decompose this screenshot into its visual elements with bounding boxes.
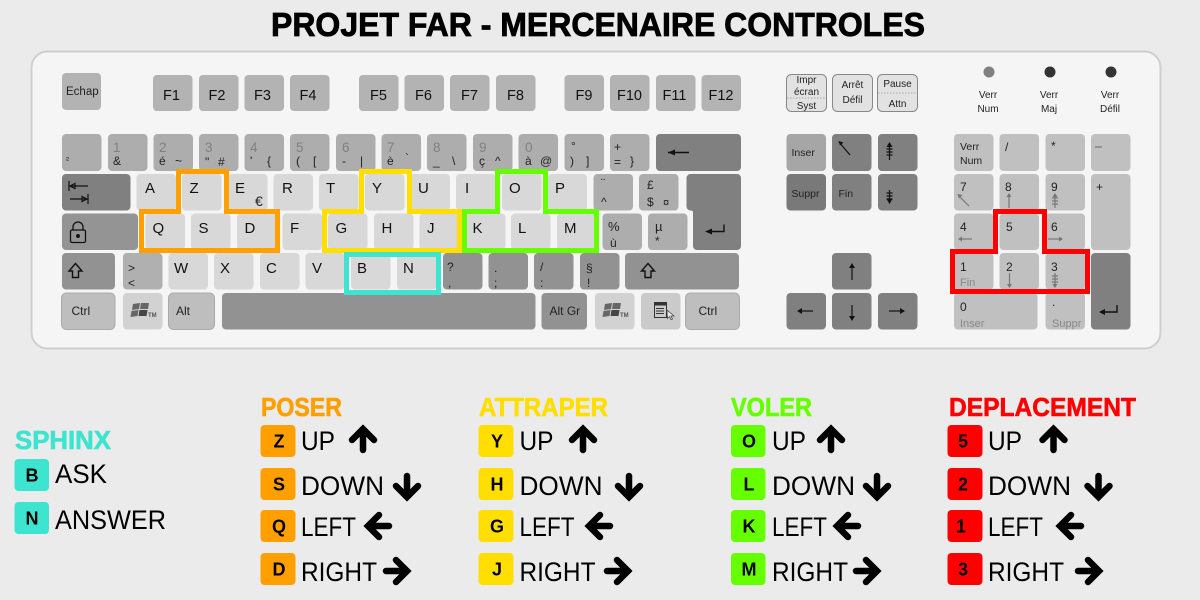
- label: answer: ANSWER: [55, 505, 166, 535]
- system keys: Arrêt: [842, 80, 864, 91]
- highlight: green keys OKLM: [464, 172, 596, 250]
- row: Y up: Y: [491, 432, 503, 452]
- letter row AZERTY: A: [145, 180, 155, 197]
- heading: deplacement: DEPLACEMENT: [949, 394, 1136, 422]
- letter row WXCV: X: [220, 260, 230, 277]
- number key row: °: [571, 139, 576, 153]
- system keys: [786, 74, 918, 112]
- panel: sphinx legend: [14, 427, 166, 535]
- number key row: =: [614, 155, 621, 169]
- function key row: F2: [208, 88, 225, 104]
- number key row: ): [570, 154, 574, 168]
- panel: attraper legend: [478, 394, 640, 587]
- number key row: `: [405, 151, 409, 165]
- row: J right: RIGHT: [520, 557, 596, 587]
- row: 3 right: RIGHT: [988, 557, 1064, 587]
- letter row AZERTY: €: [255, 193, 263, 209]
- row: G left: LEFT: [520, 512, 574, 542]
- function key row: F12: [708, 88, 734, 104]
- number key row: è: [387, 154, 394, 168]
- icon: tab arrows: [69, 181, 88, 204]
- number key row: \: [452, 154, 456, 168]
- numeric keypad: .: [1052, 295, 1055, 309]
- row: G left: G: [490, 516, 504, 536]
- highlight: cyan keys BN: [346, 254, 438, 292]
- letter row QSDF: [62, 214, 688, 250]
- numeric keypad: 5: [1006, 220, 1013, 234]
- bottom key row: Alt Gr: [550, 304, 580, 318]
- function key row: F10: [617, 88, 642, 104]
- function key row: F7: [461, 88, 478, 104]
- row: H down: DOWN: [520, 471, 602, 501]
- row: O up: O: [742, 432, 756, 452]
- letter row WXCV: .: [494, 261, 497, 275]
- letter row WXCV: N: [403, 260, 414, 277]
- row: S down: S: [273, 474, 285, 494]
- heading: voler: VOLER: [731, 394, 812, 422]
- numeric keypad: 8: [1005, 180, 1012, 194]
- number key row: 1: [113, 140, 121, 155]
- numeric keypad: 9: [1051, 180, 1058, 194]
- letter row AZERTY: ¤: [663, 197, 669, 209]
- number key row: |: [360, 154, 363, 168]
- icon: windows logo right: TM: [620, 313, 629, 319]
- letter row AZERTY: P: [555, 180, 565, 197]
- number key row: ^: [495, 154, 501, 168]
- number key row: ç: [479, 154, 485, 168]
- row: 1 left: LEFT: [988, 512, 1043, 542]
- bottom key row: Ctrl: [698, 304, 717, 318]
- status lights: Maj: [1041, 104, 1057, 115]
- row: O up: [731, 425, 842, 457]
- status lights: Défil: [1100, 104, 1120, 115]
- numeric keypad: *: [1051, 139, 1056, 153]
- number key row: &: [113, 154, 121, 168]
- letter row QSDF: H: [382, 220, 392, 237]
- letter row WXCV: §: [586, 261, 593, 275]
- system keys: Impr: [796, 75, 817, 86]
- number key row: [: [313, 154, 317, 168]
- row: J right: [478, 553, 628, 587]
- numeric keypad: 2: [1006, 260, 1013, 274]
- numeric keypad: 0: [960, 300, 967, 314]
- row: 5 up: 5: [958, 432, 968, 452]
- letter row AZERTY: $: [647, 195, 654, 209]
- number key row: ~: [175, 154, 182, 168]
- letter row QSDF: F: [290, 220, 299, 237]
- letter row WXCV: W: [174, 260, 189, 277]
- numeric keypad: 7: [960, 180, 967, 194]
- letter row AZERTY: I: [465, 180, 469, 197]
- function key row: F11: [662, 88, 686, 104]
- row: Q left: Q: [272, 516, 286, 536]
- row: D right: [260, 553, 407, 587]
- letter row AZERTY: ^: [601, 195, 607, 209]
- panel: keyboard: [32, 52, 1160, 348]
- function key row: F9: [576, 88, 592, 104]
- icon: context menu: [654, 302, 674, 320]
- letter row WXCV: <: [128, 276, 135, 290]
- icon: windows logo: [130, 303, 157, 319]
- number key row: [62, 134, 741, 171]
- row: 2 down: DOWN: [988, 471, 1071, 501]
- letter row WXCV: B: [357, 260, 367, 277]
- row: Y up: UP: [520, 426, 554, 456]
- numeric keypad: [954, 134, 1130, 330]
- row: H down: H: [490, 474, 504, 494]
- letter row AZERTY: Z: [190, 180, 199, 197]
- row: 2 down: 2: [958, 474, 968, 494]
- number key row: 7: [387, 140, 395, 155]
- system keys: écran: [794, 87, 819, 98]
- row: 1 left: [948, 510, 1081, 542]
- number key row: à: [525, 154, 532, 168]
- status lights: Verr: [979, 90, 998, 101]
- system keys: Défil: [842, 95, 863, 106]
- letter row QSDF: ù: [610, 236, 617, 250]
- system keys: Pause: [883, 79, 912, 90]
- bottom key row: [62, 293, 740, 330]
- numeric keypad: Fin: [960, 277, 975, 289]
- row: L down: L: [744, 474, 754, 494]
- numeric keypad: 4: [960, 220, 967, 234]
- number key row: 2: [159, 140, 167, 155]
- letter row QSDF: µ: [655, 219, 663, 234]
- row: D right: RIGHT: [301, 557, 377, 587]
- function key row: Echap: [66, 86, 99, 98]
- numeric keypad: Verr: [960, 141, 980, 153]
- row: M right: RIGHT: [772, 557, 848, 587]
- status lights: [977, 66, 1120, 115]
- letter row AZERTY: [62, 174, 678, 210]
- icon: windows logo right: [602, 303, 629, 319]
- badge: N: [14, 502, 49, 534]
- row: K left: K: [742, 516, 756, 536]
- panel: deplacement legend: [948, 394, 1136, 587]
- row: Z up: Z: [274, 432, 284, 452]
- row: 5 up: [948, 425, 1064, 457]
- letter row AZERTY: O: [509, 180, 521, 197]
- row: Z up: UP: [301, 426, 335, 456]
- status lights: Verr: [1101, 90, 1120, 101]
- row: Q left: [260, 510, 389, 542]
- row: Q left: LEFT: [301, 512, 356, 542]
- navigation keys: Fin: [838, 188, 853, 200]
- badge: B: B: [26, 466, 38, 486]
- heading: attraper: ATTRAPER: [479, 394, 608, 422]
- row: 1 left: 1: [956, 516, 966, 536]
- row: J right: J: [492, 560, 502, 580]
- row: S down: DOWN: [301, 471, 384, 501]
- highlight: yellow keys YGHJ: [324, 172, 460, 250]
- highlight: red keys 5123: [952, 212, 1088, 292]
- row: H down: [478, 468, 640, 501]
- icon: windows logo: TM: [148, 313, 157, 319]
- number key row: é: [159, 154, 166, 168]
- numeric keypad: 1: [960, 260, 967, 274]
- number key row: 5: [296, 140, 304, 155]
- navigation keys: Inser: [792, 147, 815, 159]
- panel: poser legend: [260, 394, 418, 587]
- function key row: F6: [415, 88, 432, 104]
- number key row: ": [205, 155, 209, 169]
- navigation keys: [786, 134, 918, 210]
- badge: N: N: [26, 508, 38, 528]
- function key row: F5: [370, 88, 387, 104]
- heading: sphinx: SPHINX: [15, 427, 111, 455]
- letter row QSDF: Q: [152, 220, 164, 237]
- icon: backspace arrow: [668, 150, 689, 156]
- row: Y up: [478, 425, 594, 457]
- numeric keypad: /: [1005, 140, 1009, 154]
- letter row AZERTY: £: [647, 178, 654, 192]
- letter row QSDF: L: [518, 220, 526, 237]
- letter row QSDF: G: [336, 220, 347, 237]
- bottom key row: Ctrl: [72, 304, 90, 318]
- row: G left: [478, 510, 610, 542]
- label: ask: ASK: [55, 459, 107, 489]
- heading: poser: POSER: [261, 394, 342, 422]
- number key row: ²: [66, 155, 69, 165]
- system keys: Syst: [797, 101, 816, 112]
- row: L down: [731, 468, 888, 501]
- number key row: ': [250, 154, 252, 168]
- letter row AZERTY: Y: [372, 180, 382, 197]
- icon: left shift arrow: [69, 264, 82, 278]
- letter row QSDF: %: [608, 219, 620, 234]
- number key row: }: [630, 154, 634, 168]
- highlight: orange keys ZQSD: [142, 172, 278, 250]
- row: 2 down: [948, 468, 1110, 501]
- system keys: Attn: [889, 99, 906, 110]
- navigation keys: Suppr: [792, 188, 820, 200]
- letter row WXCV: V: [312, 260, 322, 277]
- number key row: @: [540, 154, 552, 168]
- numeric keypad: Num: [960, 155, 982, 167]
- icon: right shift arrow: [642, 264, 654, 278]
- status lights: Num: [977, 104, 999, 115]
- numeric keypad: 3: [1051, 260, 1058, 274]
- row: 3 right: 3: [958, 560, 968, 580]
- number key row: -: [342, 154, 346, 168]
- row: M right: [731, 553, 877, 587]
- letter row AZERTY: U: [418, 180, 429, 197]
- function key row: F3: [254, 88, 271, 104]
- bottom key row: Alt: [176, 304, 191, 318]
- letter row WXCV: [62, 253, 739, 290]
- number key row: #: [218, 155, 225, 169]
- row: M right: M: [742, 560, 756, 580]
- letter row AZERTY: T: [326, 180, 335, 197]
- letter row WXCV: ?: [447, 260, 454, 274]
- numeric keypad: +: [1096, 180, 1103, 194]
- row: D right: D: [272, 560, 286, 580]
- number key row: {: [267, 154, 271, 168]
- letter row QSDF: S: [198, 220, 209, 237]
- row: K left: [731, 510, 858, 542]
- badge: B: [14, 459, 49, 491]
- numeric keypad: Inser: [960, 318, 985, 330]
- function key row: [62, 73, 741, 111]
- number key row: 9: [479, 140, 487, 155]
- row: S down: [260, 468, 418, 501]
- letter row QSDF: M: [564, 220, 576, 237]
- number key row: 6: [342, 140, 350, 155]
- letter row AZERTY: E: [235, 180, 245, 197]
- letter row QSDF: *: [655, 234, 660, 248]
- letter row AZERTY: R: [282, 180, 293, 197]
- function key row: F8: [507, 88, 524, 104]
- function key row: F4: [300, 88, 316, 104]
- status lights: Verr: [1040, 90, 1059, 101]
- number key row: 8: [433, 140, 441, 155]
- panel: voler legend: [731, 394, 888, 587]
- row: 3 right: [948, 553, 1099, 587]
- enter key: [686, 174, 741, 250]
- row: O up: UP: [772, 426, 806, 456]
- row: K left: LEFT: [772, 512, 827, 542]
- letter row WXCV: C: [266, 260, 277, 277]
- number key row: (: [296, 154, 300, 168]
- number key row: ]: [586, 154, 589, 168]
- title: PROJET FAR - MERCENAIRE CONTROLES: [271, 6, 925, 43]
- number key row: 3: [205, 140, 213, 155]
- number key row: 0: [525, 140, 533, 155]
- letter row WXCV: !: [587, 276, 590, 290]
- letter row WXCV: ;: [494, 276, 497, 290]
- numeric keypad: Suppr: [1052, 318, 1082, 330]
- letter row QSDF: D: [244, 220, 256, 237]
- letter row AZERTY: ¨: [601, 176, 605, 190]
- arrow keys: [786, 253, 918, 330]
- row: L down: DOWN: [772, 471, 855, 501]
- number key row: +: [614, 140, 621, 154]
- letter row QSDF: J: [427, 220, 434, 237]
- row: Z up: [260, 425, 374, 457]
- icon: caps lock padlock: [70, 222, 86, 242]
- number key row: 4: [250, 140, 258, 155]
- number key row: _: [432, 154, 440, 168]
- letter row WXCV: >: [128, 261, 135, 275]
- function key row: F1: [163, 88, 180, 104]
- letter row WXCV: ,: [448, 276, 451, 290]
- letter row WXCV: /: [540, 260, 544, 274]
- numeric keypad: 6: [1051, 220, 1058, 234]
- row: 5 up: UP: [988, 426, 1022, 456]
- letter row QSDF: K: [472, 220, 483, 237]
- letter row WXCV: :: [540, 276, 543, 290]
